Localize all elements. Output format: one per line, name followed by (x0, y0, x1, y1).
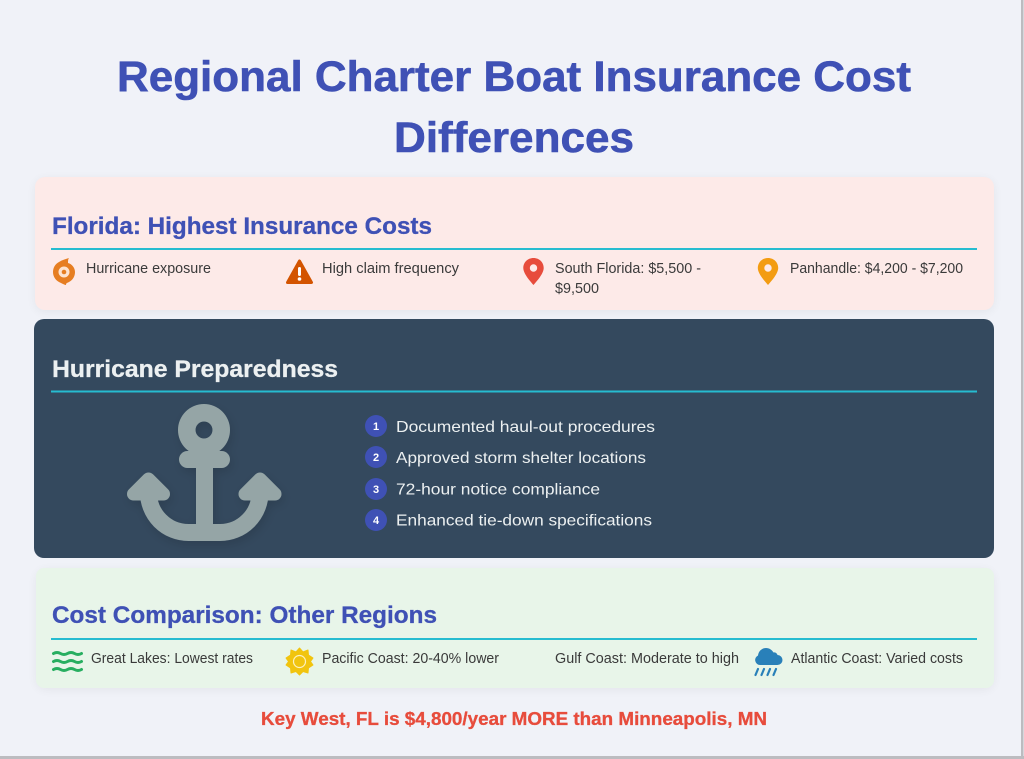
text: Panhandle range: Panhandle: $4,200 - $7,200 (790, 261, 963, 277)
text: South Florida range: $9,500 (555, 281, 599, 297)
text: South Florida range (555, 261, 701, 297)
panel: hurricane preparedness (34, 319, 994, 558)
step 2: Approved storm shelter locations (396, 450, 646, 467)
step 4 (365, 509, 652, 531)
heading: Florida: Florida: Highest Insurance Costs (52, 213, 432, 240)
heading: cost comparison: Cost Comparison: Other Regions (52, 602, 437, 629)
step 4: Enhanced tie-down specifications (396, 512, 652, 530)
list: preparedness steps (365, 415, 655, 531)
icon: anchor (134, 404, 275, 535)
text: Atlantic Coast: Atlantic Coast: Varied costs (791, 651, 963, 667)
text: hurricane exposure: Hurricane exposure (86, 261, 211, 277)
title (117, 53, 911, 162)
step 1 (365, 415, 655, 437)
step 2: 2 (373, 452, 379, 464)
icon: warning triangle (288, 261, 312, 282)
icon: red map pin (523, 258, 544, 285)
step 4: 4 (373, 515, 380, 527)
text: South Florida range: South Florida: $5,500 - (555, 261, 701, 277)
title: Regional Charter Boat Insurance Cost (117, 53, 911, 101)
step 3 (365, 478, 600, 500)
step 3: 3 (373, 484, 379, 496)
step 1: Documented haul-out procedures (396, 419, 655, 436)
title: Differences (394, 114, 634, 162)
panel: other regions cost comparison (36, 568, 994, 690)
icon: water waves (54, 652, 82, 670)
icon: hurricane (53, 258, 75, 285)
text: high claim frequency: High claim frequency (322, 261, 460, 277)
heading: hurricane preparedness: Hurricane Preparedness (52, 356, 338, 383)
callout: Key West comparison: Key West, FL is $4,800/year MORE than Minneapolis, MN (261, 709, 767, 729)
step 1: 1 (373, 421, 379, 433)
text: Gulf Coast: Gulf Coast: Moderate to high (555, 651, 739, 667)
text: Pacific Coast: Pacific Coast: 20-40% lower (322, 651, 499, 667)
step 2 (365, 446, 646, 468)
panel: Florida highest insurance costs (35, 177, 994, 312)
icon: rain cloud (755, 648, 782, 675)
icon: sun (286, 648, 313, 675)
icon: orange map pin (758, 258, 778, 285)
step 3: 72-hour notice compliance (396, 482, 600, 498)
text: Great Lakes: Great Lakes: Lowest rates (91, 651, 253, 667)
